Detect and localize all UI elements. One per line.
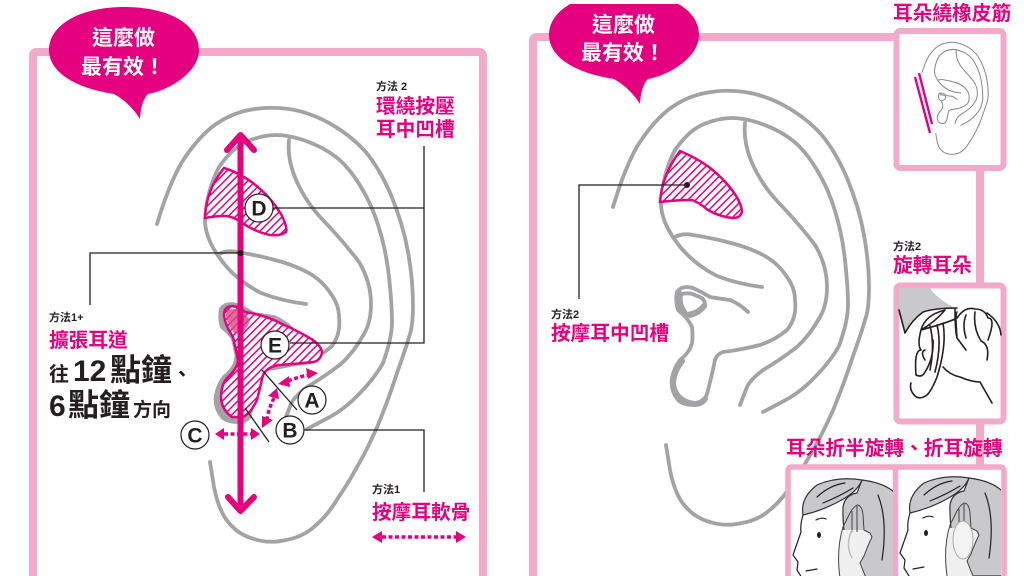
- label: method 1+: 方法1+: [49, 310, 84, 324]
- label: rotate ear: 旋轉耳朵: [893, 255, 972, 277]
- leader line right: [579, 182, 690, 299]
- label: method 1+: 往: [49, 364, 69, 386]
- hatched area E: [218, 306, 322, 420]
- vertical double arrow: [227, 135, 254, 511]
- inset frame 1: [896, 31, 1004, 168]
- speech bubble left: 最有效！: [81, 56, 165, 79]
- label: method 1+: 點鐘: [68, 388, 130, 423]
- label: method 1: 按摩耳軟骨: [372, 501, 470, 524]
- illustration: right ear outline: [613, 91, 869, 525]
- label: rotate ear: 方法2: [893, 239, 921, 253]
- inset: rotate ear: [893, 239, 1004, 422]
- heading: rubber band: 耳朵繞橡皮筋: [893, 3, 1011, 25]
- head left: [793, 479, 895, 576]
- dashed arrow B: [262, 388, 279, 428]
- inset: rubber band on ear: [893, 3, 1011, 168]
- rubber band lines: [915, 73, 932, 133]
- mini ear: [922, 42, 988, 154]
- label: method 2: 耳中凹槽: [376, 119, 455, 141]
- marker C: C: [187, 424, 203, 448]
- marker E: E: [268, 334, 282, 358]
- label: method 1: 方法1: [372, 482, 400, 496]
- label: massage groove: 按摩耳中凹槽: [551, 322, 669, 345]
- heading: fold ear: 耳朵折半旋轉、折耳旋轉: [786, 438, 1003, 460]
- panel: right ear method: [533, 0, 895, 576]
- inset frame 2: [896, 286, 1004, 422]
- label: method 1+: 、: [172, 364, 192, 386]
- illustration: left ear outline: [157, 108, 413, 542]
- speech bubble right: 最有效！: [581, 42, 665, 65]
- panel: left ear method: [33, 7, 483, 576]
- leader dot on arrow: [238, 250, 244, 256]
- inset: fold ear: [786, 438, 1004, 576]
- label: method 1+: 方向: [133, 398, 171, 421]
- hatched area right: [660, 151, 742, 218]
- marker B: B: [282, 420, 298, 442]
- speech bubble right: [549, 0, 699, 104]
- marker A: [298, 386, 326, 414]
- label: method 1: [372, 482, 470, 524]
- panel frame left: [33, 52, 483, 576]
- speech bubble right: 這麼做: [592, 13, 655, 37]
- label: massage groove: [551, 307, 669, 345]
- label: method 1+: 擴張耳道: [49, 329, 128, 352]
- label: method 1+: 點鐘: [110, 353, 172, 388]
- inset frame 3: [788, 467, 1004, 576]
- label: rotate ear: [893, 239, 972, 277]
- dashed arrow A: [278, 368, 318, 387]
- marker D: [245, 194, 273, 222]
- label: method 2: 環繞按壓: [376, 95, 455, 118]
- label: method 1+: [49, 310, 192, 423]
- dashed arrow C: [215, 428, 260, 440]
- head right: [900, 477, 1002, 576]
- marker B: [276, 416, 304, 444]
- label: method 1+: 12: [73, 355, 106, 388]
- hatched area D: [205, 168, 286, 235]
- label: method 2: [376, 79, 455, 141]
- panel frame right: [533, 37, 895, 576]
- connector bars: [976, 168, 984, 470]
- speech bubble left: 這麼做: [92, 26, 155, 50]
- marker C: [181, 421, 209, 449]
- label: method 1+: 6: [49, 390, 66, 423]
- speech bubble left: [49, 7, 199, 119]
- label: method 2: 方法 2: [376, 79, 407, 93]
- marker A: A: [304, 390, 320, 412]
- marker D: D: [251, 198, 267, 220]
- marker E: [261, 331, 289, 359]
- hand and ear sketch: [899, 288, 1001, 403]
- label: massage groove: 方法2: [551, 307, 579, 321]
- legend dashed arrow: [372, 531, 466, 543]
- leader lines left: [90, 146, 424, 492]
